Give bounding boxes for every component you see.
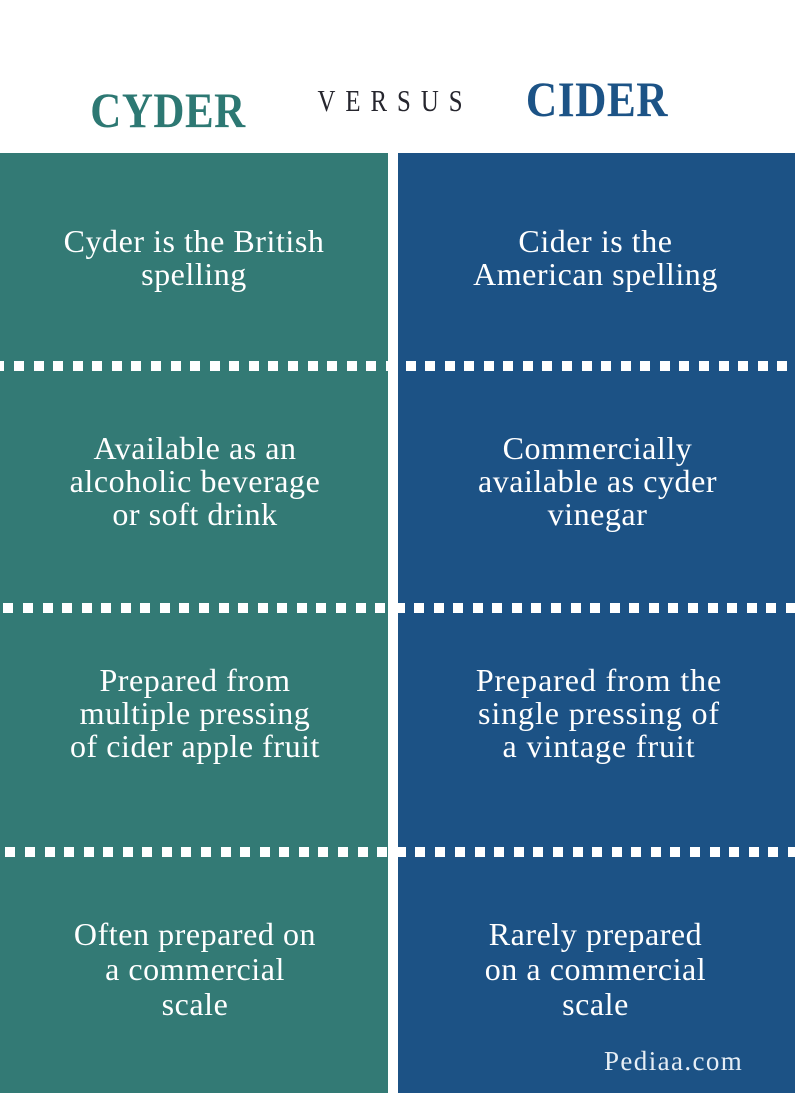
text: cyder row 2: or soft drink: [112, 496, 278, 532]
text: cider row 3: single pressing of: [478, 695, 720, 731]
text: cyder row 3: [70, 662, 320, 764]
text: cider row 2: vinegar: [548, 496, 647, 532]
text: cider row 3: a vintage fruit: [502, 728, 695, 764]
text: cyder row 4: Often prepared on: [74, 916, 316, 952]
text: cyder row 3: of cider apple fruit: [70, 728, 320, 764]
text: cider row 2: [478, 430, 717, 532]
text: cyder row 1: [64, 223, 324, 292]
text: cyder row 1: Cyder is the British: [64, 223, 324, 259]
text: cyder row 2: alcoholic beverage: [70, 463, 320, 499]
text: cyder row 2: [70, 430, 320, 532]
title: cyder: CYDER: [90, 82, 246, 138]
text: cider row 2: Commercially: [503, 430, 692, 466]
divider row 3: [5, 847, 795, 857]
text: cider row 1: American spelling: [473, 256, 718, 292]
divider row 1: [0, 361, 787, 371]
text: cider row 1: Cider is the: [518, 223, 673, 259]
text: cider row 2: available as cyder: [478, 463, 717, 499]
panel: cyder column: [0, 153, 388, 1093]
text: cyder row 3: Prepared from: [99, 662, 291, 698]
text: cyder row 4: [74, 916, 316, 1022]
text: cider row 3: [476, 662, 722, 764]
text: cider row 4: on a commercial: [485, 951, 706, 987]
divider row 2: [3, 603, 795, 613]
panel: cider column: [398, 153, 795, 1093]
text: cyder row 4: scale: [162, 986, 228, 1022]
text: cider row 4: scale: [562, 986, 629, 1022]
text: cyder row 3: multiple pressing: [80, 695, 310, 731]
text: cyder row 1: spelling: [141, 256, 247, 292]
title: cider: CIDER: [526, 71, 668, 127]
text: cider row 1: [473, 223, 718, 292]
text: cider row 3: Prepared from the: [476, 662, 722, 698]
text: cider row 4: Rarely prepared: [489, 916, 702, 952]
logo: Pediaa.com: Pediaa.com: [604, 1046, 743, 1076]
text: cider row 4: [485, 916, 706, 1022]
text: cyder row 4: a commercial: [105, 951, 285, 987]
text: cyder row 2: Available as an: [93, 430, 297, 466]
title: versus: VERSUS: [317, 83, 473, 118]
